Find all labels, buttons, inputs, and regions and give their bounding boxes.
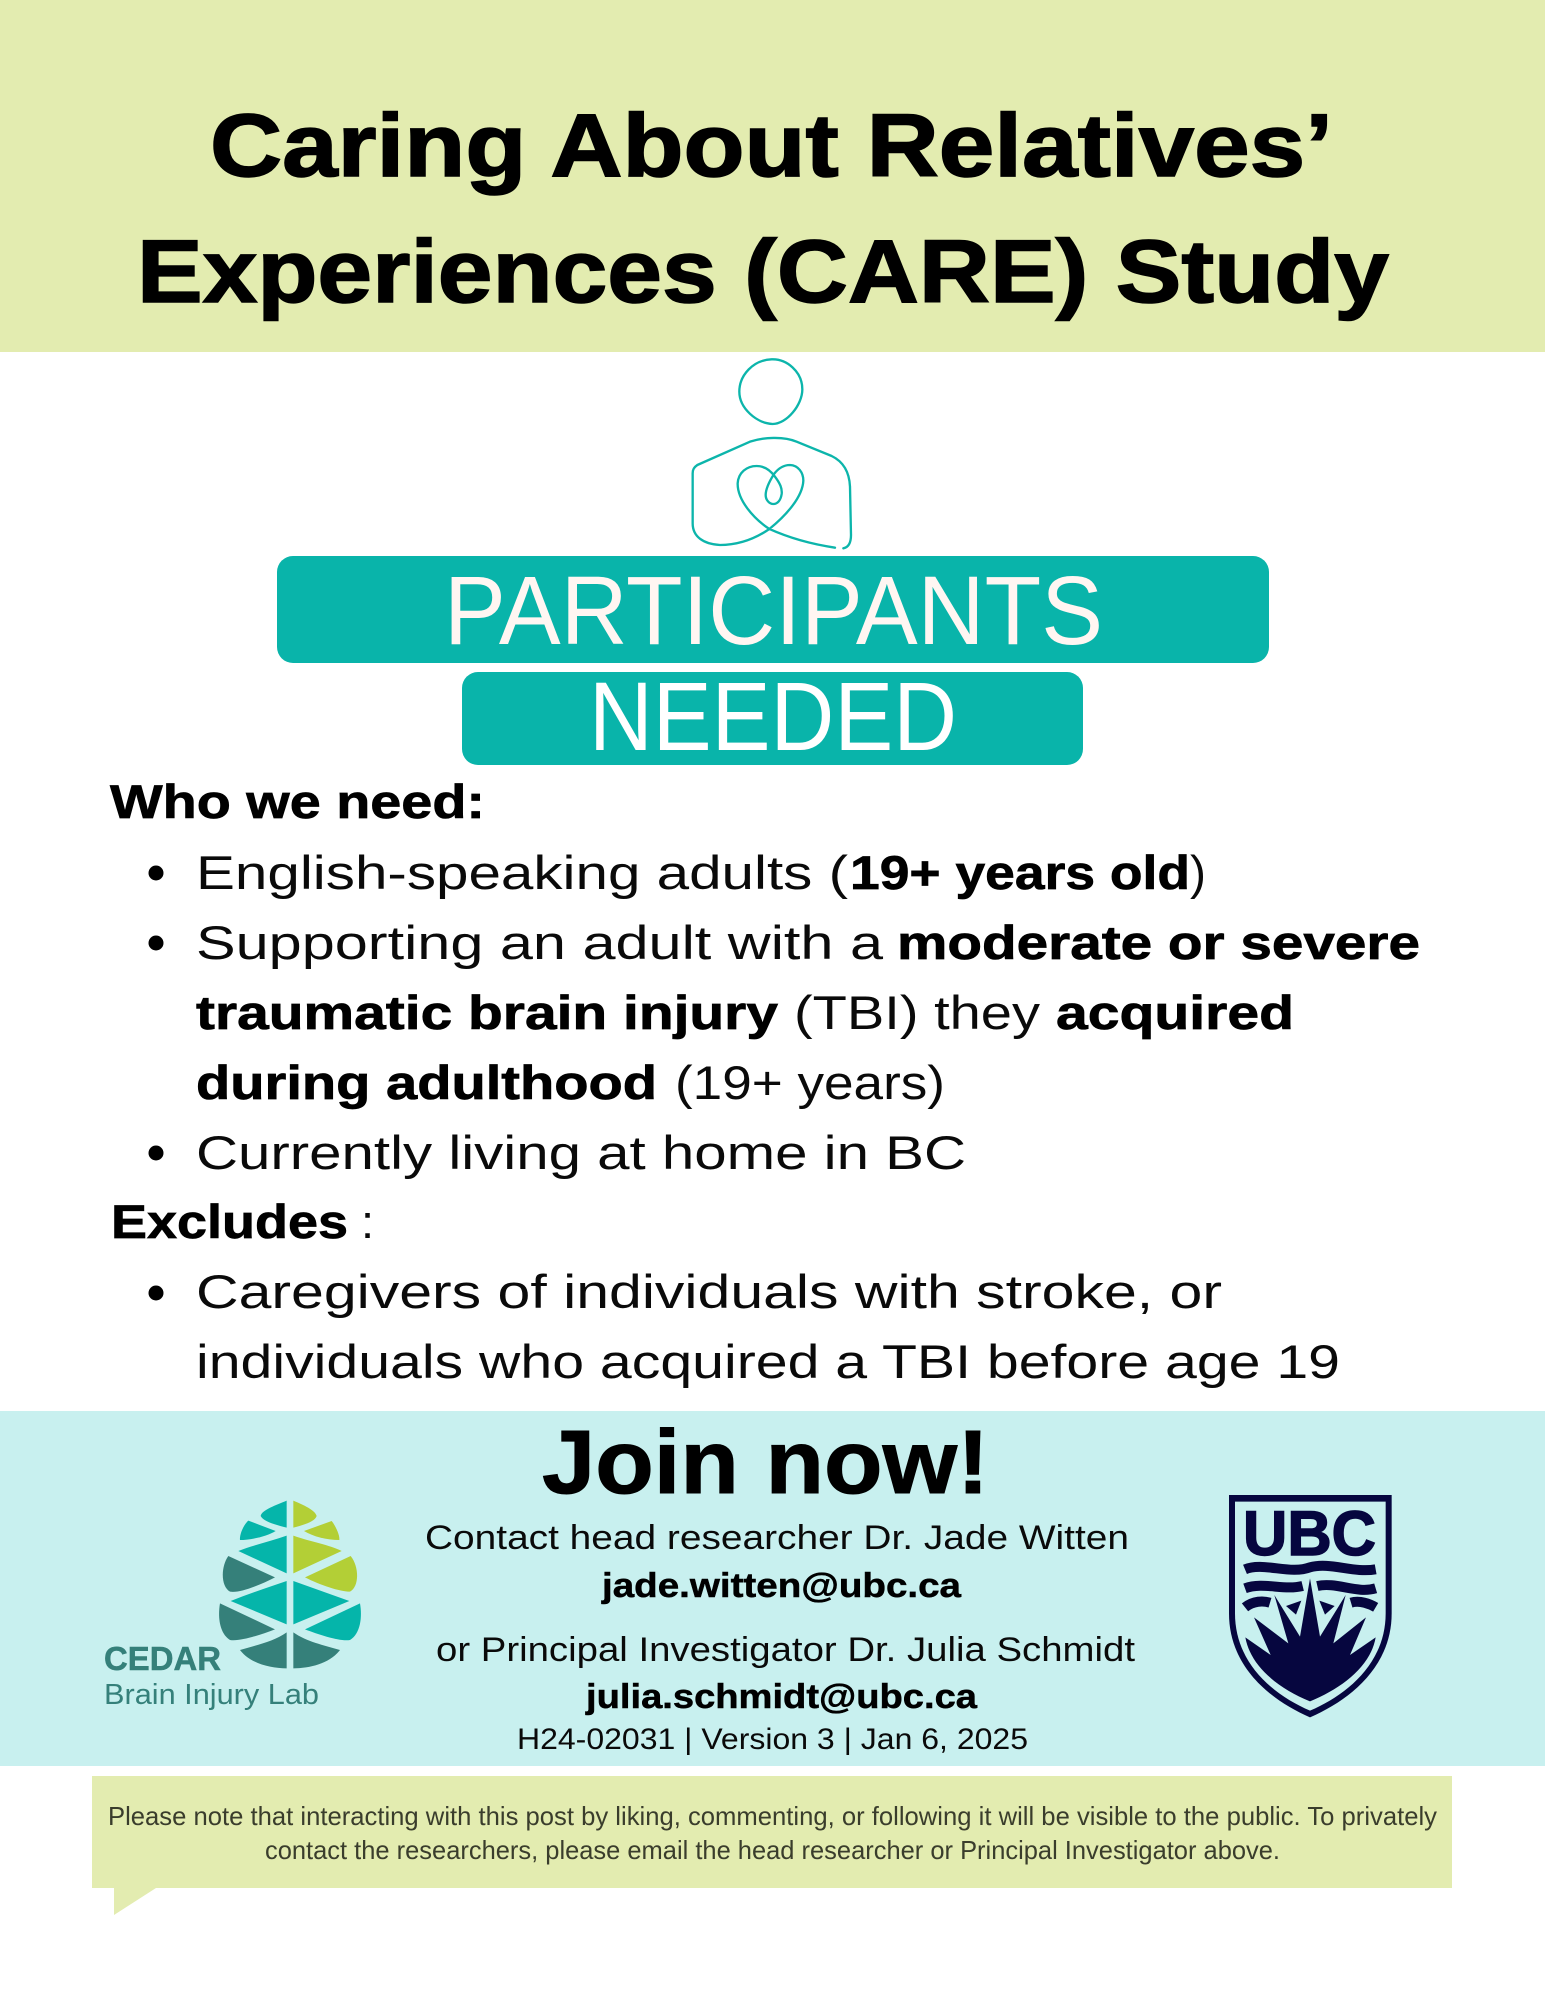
bullet: supporting an adult: (TBI) they <box>794 986 1041 1039</box>
bullet: age <box>148 846 1206 899</box>
list: exclusion criteria: individuals who acquired a TBI before age 19 <box>196 1335 1340 1388</box>
title: Caring About Relatives’ <box>210 95 1333 195</box>
banner: participants <box>277 556 1269 665</box>
panel: join now <box>0 1411 1545 1766</box>
logo: UBC shield <box>1229 1495 1392 1717</box>
bullet: supporting an adult: moderate or severe <box>897 916 1420 969</box>
logo: CEDAR Brain Injury Lab: CEDAR <box>104 1640 221 1677</box>
callout: privacy note: contact the researchers, please email the head researcher or Principal Investigator above. <box>265 1835 1280 1865</box>
icon: person with heart line drawing <box>693 359 851 548</box>
contact details: Contact head researcher Dr. Jade Witten <box>425 1519 1129 1557</box>
contact details: jade.witten@ubc.ca <box>601 1567 962 1605</box>
callout: privacy note: Please note that interacting with this post by liking, commenting, or following it will be visible to the public. To privately <box>108 1801 1437 1831</box>
bullet: supporting an adult: acquired <box>1056 986 1294 1039</box>
logo: CEDAR Brain Injury Lab <box>104 1501 361 1711</box>
banner: needed: NEEDED <box>589 662 957 771</box>
contact details <box>425 1519 1136 1756</box>
bullet: living at home: Currently living at home in BC <box>196 1126 966 1179</box>
bullet: supporting an adult: (19+ years) <box>675 1056 945 1109</box>
contact details: H24-02031 | Version 3 | Jan 6, 2025 <box>517 1723 1028 1756</box>
list: exclusion criteria <box>148 1265 1340 1388</box>
heading: join now: Join now! <box>542 1413 989 1513</box>
bullet: supporting an adult: traumatic brain injury <box>196 986 778 1039</box>
list: exclusion criteria: Caregivers of individuals with stroke, or <box>196 1265 1222 1318</box>
banner: needed <box>462 662 1083 771</box>
bullet: age: ) <box>1190 846 1206 899</box>
banner: participants: PARTICIPANTS <box>444 556 1103 665</box>
bullet: supporting an adult <box>148 916 1420 1109</box>
title: Experiences (CARE) Study <box>137 221 1390 321</box>
logo: UBC shield: UBC <box>1243 1499 1376 1569</box>
title banner <box>0 0 1545 352</box>
contact details: or Principal Investigator Dr. Julia Schmidt <box>436 1631 1136 1669</box>
callout: privacy note <box>92 1776 1452 1915</box>
title <box>137 95 1390 321</box>
bullet: age: English-speaking adults ( <box>196 846 848 899</box>
bullet: age: 19+ years old <box>850 846 1190 899</box>
heading: who we need: Who we need: <box>110 775 485 828</box>
heading: excludes: Excludes <box>111 1195 348 1248</box>
logo: CEDAR Brain Injury Lab: Brain Injury Lab <box>104 1679 319 1711</box>
heading: excludes: : <box>361 1195 374 1248</box>
bullet: supporting an adult: during adulthood <box>196 1056 657 1109</box>
contact details: julia.schmidt@ubc.ca <box>585 1678 978 1716</box>
bullet: supporting an adult: Supporting an adult with a <box>196 916 884 969</box>
list: who we need criteria <box>148 846 1420 1179</box>
